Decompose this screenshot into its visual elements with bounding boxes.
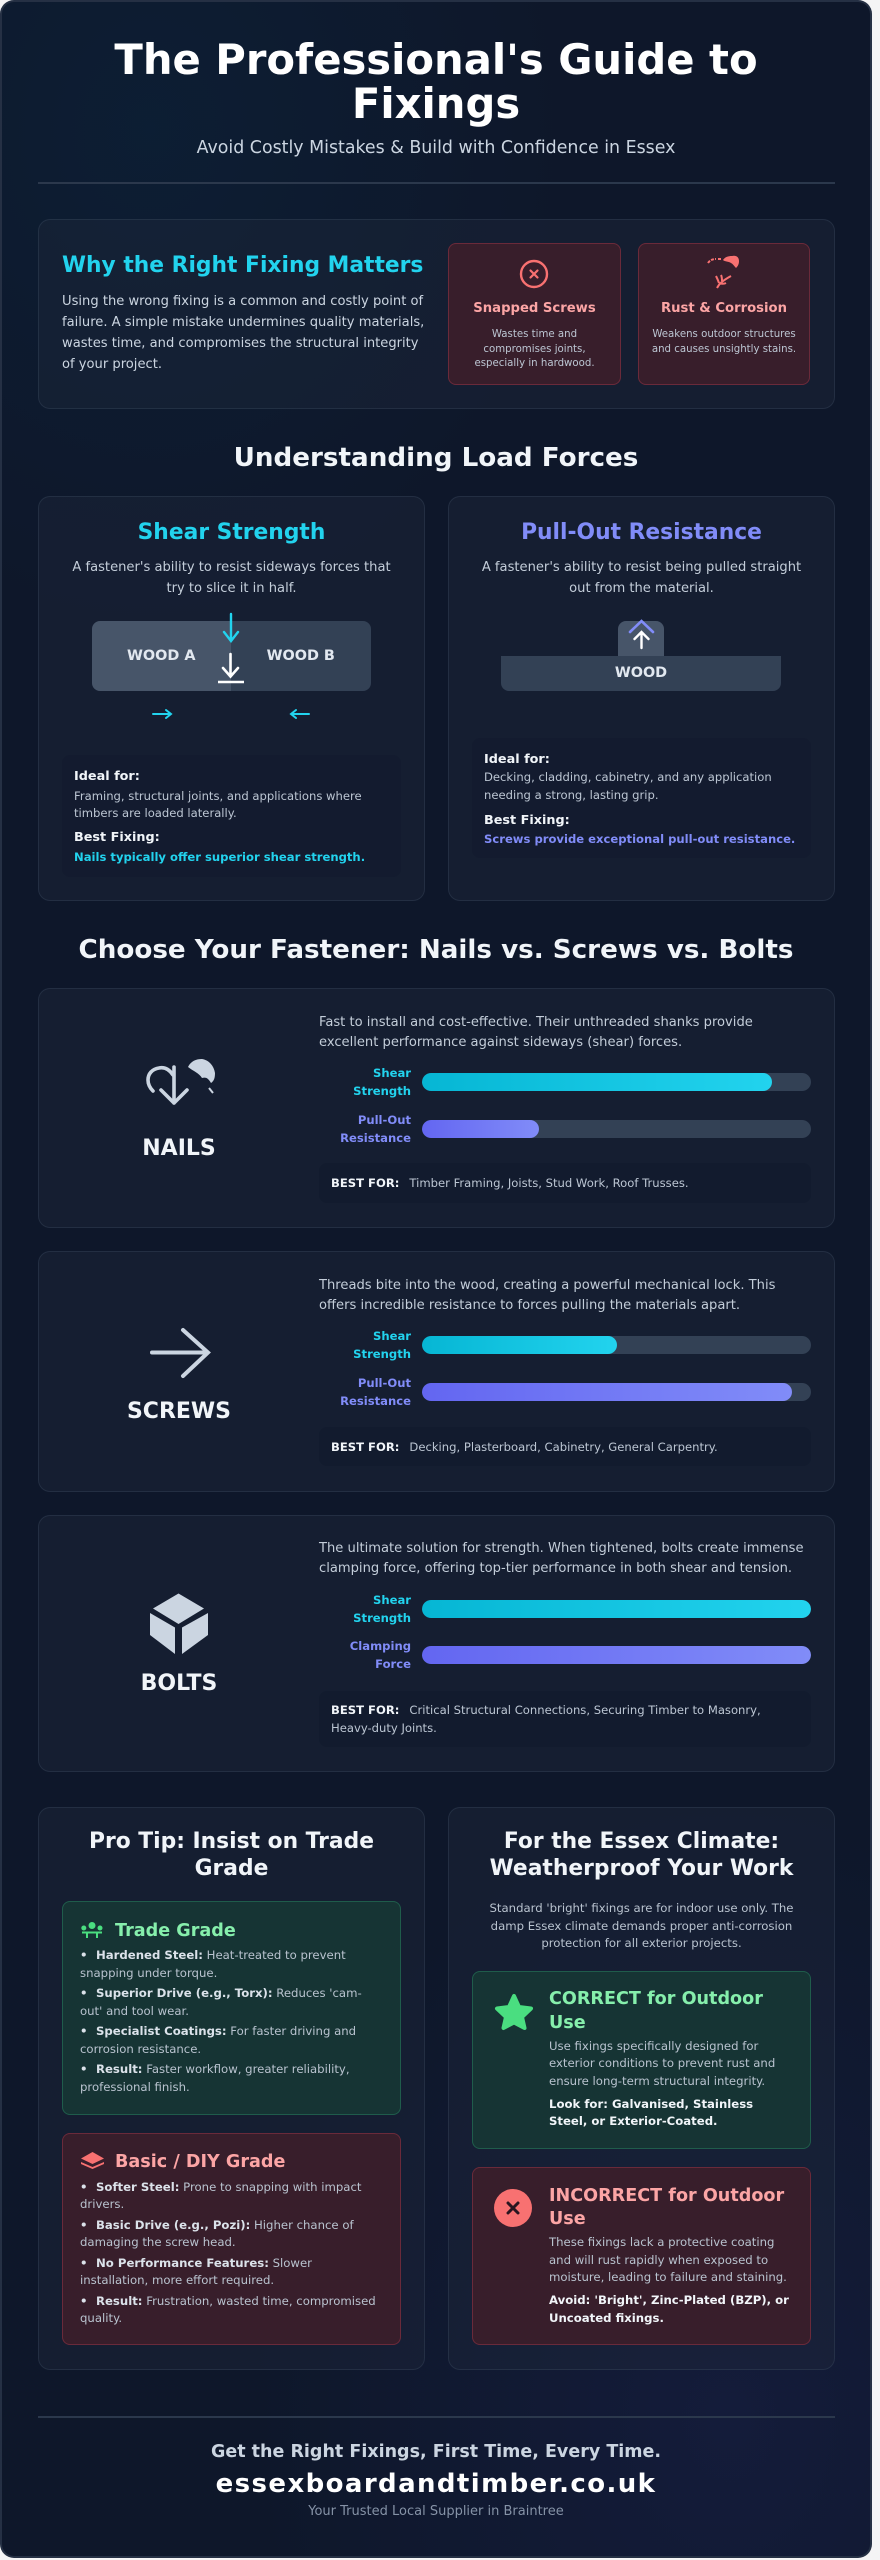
label: Shear	[373, 1329, 411, 1343]
bar: shear	[353, 1593, 811, 1624]
best label: Best Fixing:	[74, 830, 160, 845]
pull-out description: out from the material.	[569, 580, 714, 596]
footer note: Your Trusted Local Supplier in Braintree	[308, 2504, 564, 2519]
description: Fast to install and cost-effective. Their unthreaded shanks provide	[319, 1015, 753, 1030]
text: exterior conditions to prevent rust and	[549, 2056, 775, 2070]
arrows	[628, 619, 654, 650]
box: correct	[472, 1970, 811, 2149]
description: offers incredible resistance to forces pulling the materials apart.	[319, 1298, 740, 1313]
item: out' and tool wear.	[80, 2004, 189, 2018]
shear title: Shear Strength	[138, 520, 325, 545]
item: Superior Drive (e.g., Torx): Reduces 'cam-	[96, 1986, 362, 2000]
icon: layers	[81, 2152, 104, 2169]
shear description: try to slice it in half.	[166, 580, 297, 596]
intro paragraph: of your project.	[62, 357, 162, 372]
card text	[474, 329, 595, 369]
shear description: A fastener's ability to resist sideways forces that	[72, 560, 391, 575]
intro: Standard 'bright' fixings are for indoor use only. The	[490, 1901, 793, 1915]
text: moisture, leading to failure and staining.	[549, 2270, 787, 2284]
ideal label: Ideal for:	[484, 752, 550, 767]
list	[80, 1948, 362, 2094]
best for: BEST FOR: Timber Framing, Joists, Stud Work, Roof Trusses.	[331, 1176, 689, 1190]
text	[549, 2038, 775, 2090]
best for	[319, 1691, 811, 1747]
box title: Basic / DIY Grade	[115, 2152, 285, 2172]
ideal text	[74, 788, 362, 820]
diagram: shear	[92, 612, 371, 719]
heading: For the Essex Climate:	[504, 1829, 779, 1854]
title	[549, 1988, 763, 2035]
item: snapping under torque.	[80, 1966, 217, 1980]
footer call to action: Get the Right Fixings, First Time, Every Time.	[211, 2442, 661, 2462]
wood: WOOD	[615, 665, 667, 681]
title: Fixings	[352, 78, 520, 128]
icon: screw	[150, 1328, 211, 1378]
bar: clamping	[350, 1639, 811, 1670]
panel: essex climate	[448, 1807, 835, 2370]
item: Result: Frustration, wasted time, compromised	[96, 2294, 376, 2308]
intro: damp Essex climate demands proper anti-corrosion	[491, 1918, 792, 1932]
intro paragraph: Using the wrong fixing is a common and costly point of	[62, 294, 423, 309]
item: Result: Faster workflow, greater reliability,	[96, 2062, 350, 2076]
track	[422, 1120, 811, 1138]
avoid: Uncoated fixings.	[549, 2310, 664, 2324]
heading: load forces: Understanding Load Forces	[234, 443, 638, 473]
description: Threads bite into the wood, creating a powerful mechanical lock. This	[319, 1278, 775, 1293]
item: •	[80, 1986, 87, 2000]
label: Force	[375, 1656, 411, 1670]
title: Use	[549, 2012, 586, 2032]
intro paragraph	[62, 294, 424, 372]
box: basic grade	[62, 2132, 401, 2345]
bar: pull-out	[340, 1376, 811, 1408]
item	[80, 2178, 361, 2214]
wood A	[92, 621, 231, 691]
label	[353, 1329, 411, 1360]
item: professional finish.	[80, 2080, 190, 2094]
item	[80, 2254, 312, 2290]
title: Use	[549, 2209, 586, 2229]
panel: pro tip	[38, 1807, 425, 2370]
heading	[89, 1829, 374, 1880]
bar: pull-out	[340, 1113, 811, 1144]
text: These fixings lack a protective coating	[549, 2235, 774, 2249]
item: corrosion resistance.	[80, 2042, 201, 2056]
label: Shear	[373, 1593, 411, 1607]
card text: especially in hardwood.	[474, 358, 595, 369]
fastener block	[618, 621, 664, 656]
wood B	[231, 621, 370, 691]
item: Hardened Steel: Heat-treated to prevent	[96, 1948, 346, 1962]
card text: compromises joints,	[483, 344, 586, 355]
panel: bolts	[38, 1515, 835, 1772]
icon: x circle	[494, 2189, 532, 2227]
title: The Professional's Guide to	[114, 35, 758, 84]
arrows	[152, 612, 310, 719]
subtitle: Avoid Costly Mistakes & Build with Confidence in Essex	[197, 138, 675, 158]
pull-out title: Pull-Out Resistance	[521, 520, 762, 545]
best label: Best Fixing:	[484, 813, 570, 828]
icon: bolt	[150, 1594, 208, 1654]
bar: shear	[353, 1329, 811, 1360]
label: Pull-Out	[358, 1376, 411, 1390]
look for	[549, 2096, 753, 2130]
description: excellent performance against sideways (shear) forces.	[319, 1035, 682, 1050]
title	[114, 35, 758, 128]
ideal text: Decking, cladding, cabinetry, and any application	[484, 770, 772, 784]
description: The ultimate solution for strength. When tightened, bolts create immense	[319, 1541, 804, 1556]
diagram: pull-out	[501, 619, 781, 691]
track	[422, 1646, 811, 1664]
panel: screws	[38, 1251, 835, 1492]
intro	[448, 1900, 835, 1952]
panel: why the right fixing matters	[38, 219, 835, 409]
item: Softer Steel: Prone to snapping with impact	[96, 2180, 361, 2194]
card text: Wastes time and	[492, 329, 577, 340]
item: damaging the screw head.	[80, 2235, 236, 2249]
card text	[652, 329, 796, 355]
title	[549, 2184, 784, 2232]
best for	[319, 1163, 811, 1203]
heading	[448, 1829, 835, 1882]
name: SCREWS	[127, 1399, 231, 1424]
look for: Look for: Galvanised, Stainless	[549, 2096, 753, 2110]
intro paragraph: wastes time, and compromises the structural integrity	[62, 336, 419, 351]
item	[80, 1986, 362, 2018]
title: CORRECT for Outdoor	[549, 1989, 763, 2009]
box: incorrect	[472, 2167, 811, 2345]
card title: Rust & Corrosion	[661, 301, 787, 316]
avoid: Avoid: 'Bright', Zinc-Plated (BZP), or	[549, 2293, 789, 2307]
track	[422, 1073, 811, 1091]
box: trade grade	[62, 1901, 401, 2114]
info box: shear	[62, 755, 401, 877]
text: ensure long-term structural integrity.	[549, 2074, 765, 2088]
label: Clamping	[350, 1639, 411, 1653]
label	[350, 1639, 411, 1670]
best text: Nails typically offer superior shear strength.	[74, 850, 365, 864]
bar: shear	[353, 1066, 811, 1098]
card: snapped screws	[448, 243, 621, 385]
wood B: WOOD B	[267, 648, 335, 664]
item: •	[80, 2024, 87, 2038]
label: Strength	[353, 1084, 411, 1098]
track	[422, 1336, 811, 1354]
heading: choose your fastener: Choose Your Fastener: Nails vs. Screws vs. Bolts	[78, 935, 794, 965]
pull-out description	[482, 560, 801, 596]
footer url: essexboardandtimber.co.uk	[216, 2469, 656, 2499]
wood A: WOOD A	[127, 648, 195, 664]
shear description	[72, 560, 391, 596]
look for: Steel, or Exterior-Coated.	[549, 2114, 718, 2128]
card text: Weakens outdoor structures	[652, 329, 796, 340]
label	[353, 1593, 411, 1624]
item: No Performance Features: Slower	[96, 2256, 312, 2270]
avoid	[549, 2292, 789, 2327]
item: drivers.	[80, 2197, 124, 2211]
best for	[319, 1427, 811, 1466]
label: Strength	[353, 1346, 411, 1360]
label	[353, 1066, 411, 1098]
item: Basic Drive (e.g., Pozi): Higher chance of	[96, 2218, 354, 2232]
panel: nails	[38, 988, 835, 1228]
item: installation, more effort required.	[80, 2273, 274, 2287]
icon: rust	[707, 256, 739, 288]
ideal label: Ideal for:	[74, 769, 140, 784]
pull-out description: A fastener's ability to resist being pulled straight	[482, 560, 801, 575]
name: NAILS	[142, 1136, 216, 1161]
icon: nail	[146, 1059, 215, 1105]
label	[340, 1113, 411, 1144]
description: clamping force, offering top-tier performance in both shear and tension.	[319, 1561, 792, 1576]
item	[80, 2292, 376, 2328]
heading: Weatherproof Your Work	[490, 1856, 793, 1880]
item	[80, 2062, 350, 2094]
label: Resistance	[340, 1130, 411, 1144]
item	[80, 2216, 354, 2252]
label: Resistance	[340, 1394, 411, 1408]
best text: Screws provide exceptional pull-out resistance.	[484, 832, 795, 846]
item: quality.	[80, 2311, 122, 2325]
description	[318, 1278, 775, 1313]
icon: people	[81, 1922, 102, 1938]
track	[422, 1383, 811, 1401]
track	[422, 1600, 811, 1618]
item	[80, 1948, 346, 1980]
card text: and causes unsightly stains.	[652, 344, 796, 355]
description	[319, 1015, 753, 1050]
best for: BEST FOR: Decking, Plasterboard, Cabinetry, General Carpentry.	[331, 1440, 718, 1454]
label: Strength	[353, 1610, 411, 1624]
card title: Snapped Screws	[473, 301, 596, 316]
wood	[501, 656, 781, 691]
title: INCORRECT for Outdoor	[549, 2186, 784, 2206]
panel: pull-out resistance	[448, 496, 835, 901]
description	[318, 1541, 804, 1576]
text: and will rust rapidly when exposed to	[549, 2252, 768, 2266]
item: •	[80, 2218, 87, 2232]
ideal text: needing a strong, lasting grip.	[484, 788, 659, 802]
panel: shear strength	[38, 496, 425, 901]
info box: pull-out	[472, 738, 811, 858]
item: •	[80, 2256, 87, 2270]
ideal text: timbers are loaded laterally.	[74, 806, 237, 820]
heading: why: Why the Right Fixing Matters	[62, 253, 423, 278]
best for: Heavy-duty Joints.	[331, 1720, 437, 1734]
text: Use fixings specifically designed for	[549, 2038, 758, 2052]
ideal text: Framing, structural joints, and applications where	[74, 788, 362, 802]
label: Pull-Out	[358, 1113, 411, 1127]
item: Specialist Coatings: For faster driving and	[96, 2024, 356, 2038]
intro: protection for all exterior projects.	[541, 1936, 742, 1950]
card: rust and corrosion	[638, 243, 810, 385]
item: •	[80, 1948, 87, 1962]
label: Shear	[373, 1066, 411, 1080]
icon: x in circle	[520, 260, 548, 288]
intro paragraph: failure. A simple mistake undermines quality materials,	[62, 315, 424, 330]
heading: Grade	[195, 1856, 268, 1880]
item: •	[80, 2062, 87, 2076]
icon: star	[494, 1992, 534, 2030]
ideal text	[484, 770, 772, 802]
list	[62, 2132, 401, 2344]
label	[340, 1376, 411, 1408]
item	[80, 2024, 356, 2056]
text	[549, 2234, 787, 2286]
item: •	[80, 2180, 87, 2194]
box title: Trade Grade	[115, 1920, 236, 1940]
heading: Pro Tip: Insist on Trade	[89, 1829, 374, 1854]
best for: BEST FOR: Critical Structural Connections, Securing Timber to Masonry,	[331, 1703, 761, 1717]
item: •	[80, 2294, 87, 2308]
name: BOLTS	[141, 1671, 217, 1696]
